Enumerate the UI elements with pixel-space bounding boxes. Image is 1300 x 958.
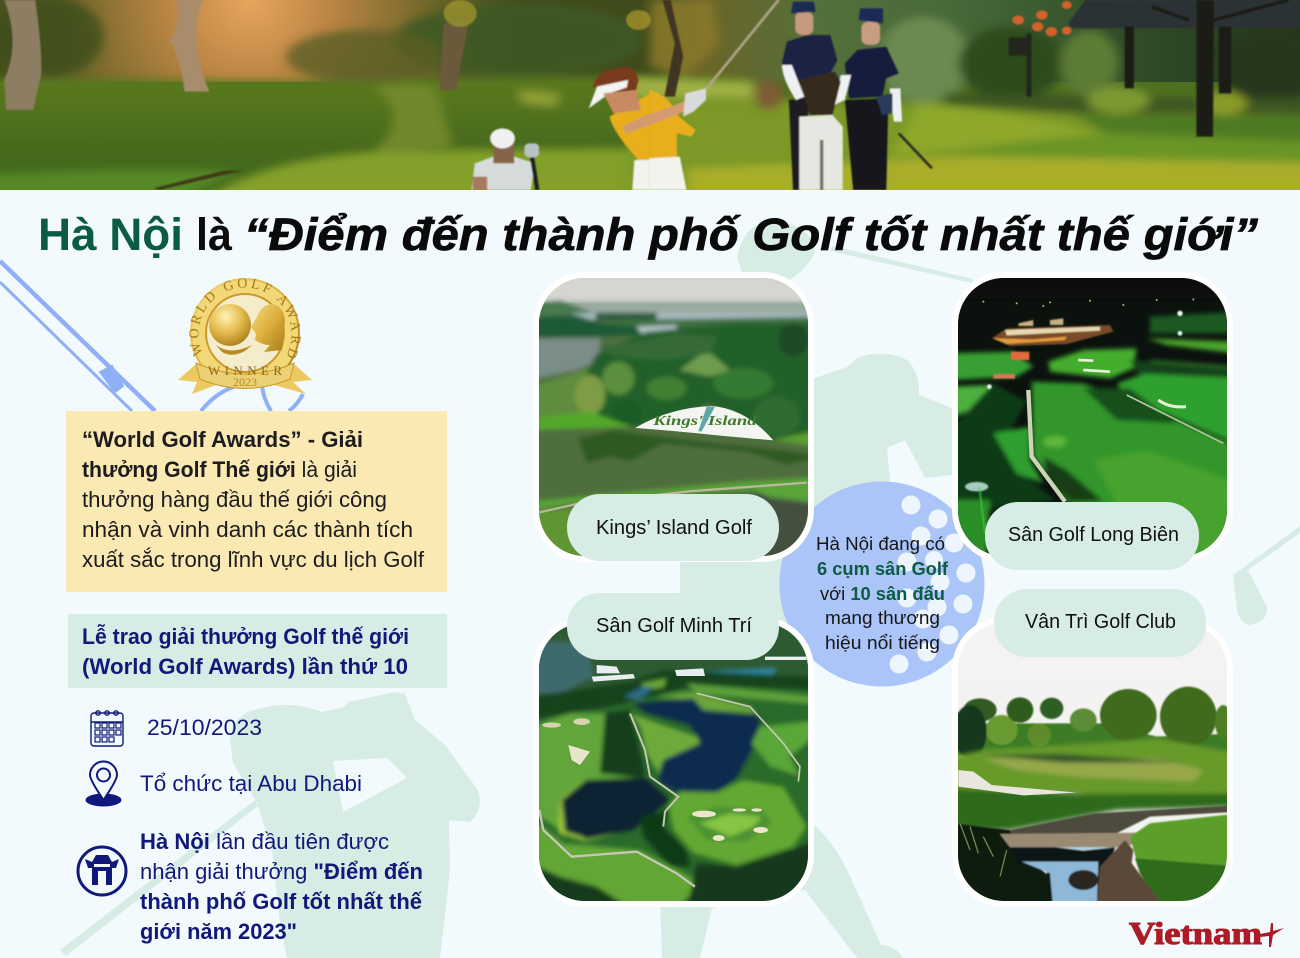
label pill: Kings' Island Golf — [567, 494, 779, 561]
icon: World Golf Awards 2023 winner medal: WINNER — [208, 363, 282, 378]
icon: World Golf Awards 2023 winner medal: 2023 — [233, 375, 257, 389]
text: Hanoi award note: nhận giải thưởng "Điểm đến — [140, 859, 423, 884]
background silhouette: golf club right — [1233, 526, 1300, 625]
icon: Hanoi emblem — [78, 847, 126, 895]
icon: location pin — [86, 762, 122, 806]
panel: World Golf Awards description: thưởng hàng đầu thế giới công — [82, 487, 387, 512]
panel: award ceremony heading — [68, 614, 447, 688]
panel: World Golf Awards description: nhận và vinh danh các thành tích — [82, 517, 413, 542]
label pill: Sân Golf Minh Trí: Sân Golf Minh Trí — [596, 615, 752, 637]
label pill: Kings' Island Golf: Kings’ Island Golf — [596, 517, 752, 539]
background silhouette: golfer centre body — [660, 353, 952, 958]
panel: World Golf Awards description: thưởng Golf Thế giới là giải — [82, 457, 357, 482]
logo: Vietnam+: Vietnam — [1129, 915, 1262, 951]
blue golf ball circle — [780, 482, 984, 686]
location text: Tổ chức tại Abu Dhabi — [140, 771, 362, 796]
text: Hanoi award note: giới năm 2023" — [140, 919, 297, 944]
card: Sân Golf Long Biên photo — [950, 270, 1240, 570]
text: Hanoi golf courses count: với 10 sân đấu — [820, 584, 945, 604]
label pill: Sân Golf Long Biên: Sân Golf Long Biên — [1008, 524, 1179, 546]
text: Hanoi golf courses count — [816, 534, 949, 653]
label pill: Sân Golf Minh Trí — [567, 593, 779, 660]
panel: award ceremony heading: (World Golf Awards) lần thứ 10 — [82, 654, 408, 679]
text: Hanoi golf courses count: Hà Nội đang có — [816, 534, 945, 554]
card: Kings' Island Golf photo — [530, 270, 820, 570]
label pill: Vân Trì Golf Club: Vân Trì Golf Club — [1025, 611, 1176, 633]
text: Hanoi golf courses count: hiệu nổi tiếng — [825, 633, 940, 653]
text: Hanoi golf courses count: mang thương — [825, 608, 940, 628]
label pill: Vân Trì Golf Club — [994, 589, 1206, 657]
panel: award ceremony heading: Lễ trao giải thưởng Golf thế giới — [82, 624, 409, 649]
text: Hanoi award note: thành phố Golf tốt nhất thế — [140, 889, 423, 914]
text: Hanoi golf courses count: 6 cụm sân Golf — [817, 559, 949, 579]
panel: World Golf Awards description: “World Golf Awards” - Giải — [82, 427, 363, 452]
title: Hà Nội — [38, 209, 183, 260]
background silhouette: golfer bottom left — [60, 692, 480, 958]
title: là — [196, 209, 233, 260]
panel: World Golf Awards description — [66, 411, 447, 592]
text: Hanoi award note: Hà Nội lần đầu tiên được — [140, 829, 389, 854]
header photo: golfers on course — [0, 0, 1300, 207]
background silhouette: golfer upper centre — [737, 221, 973, 300]
label pill: Sân Golf Long Biên — [985, 502, 1199, 570]
card: Vân Trì Golf Club photo — [950, 589, 1240, 910]
card: Kings' Island Golf photo: Kings' Island — [652, 414, 758, 429]
icon: World Golf Awards 2023 winner medal — [178, 278, 312, 394]
icon: calendar — [91, 711, 123, 746]
panel: World Golf Awards description: xuất sắc trong lĩnh vực du lịch Golf — [82, 547, 425, 572]
date text: 25/10/2023 — [147, 715, 262, 740]
text: Hanoi award note — [140, 829, 423, 944]
card: Sân Golf Minh Trí photo — [530, 593, 820, 910]
title: “Điểm đến thành phố Golf tốt nhất thế giới” — [244, 209, 1259, 260]
blue golf club decoration — [0, 261, 303, 411]
